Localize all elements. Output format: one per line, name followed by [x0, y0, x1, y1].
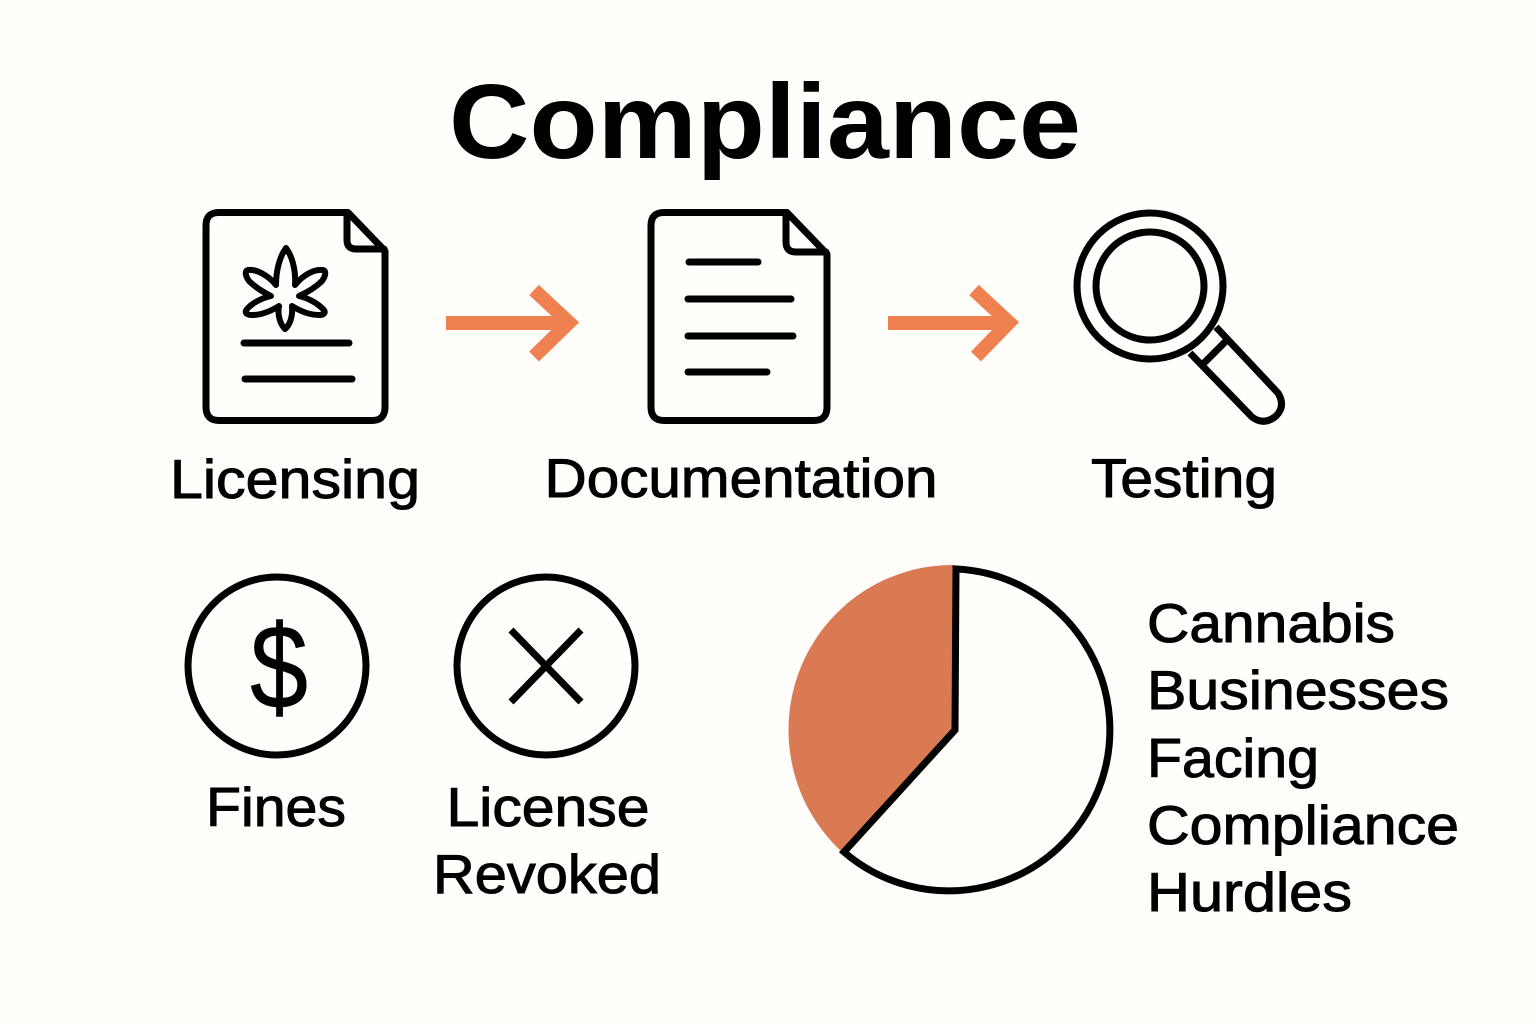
label: licensing: Licensing	[170, 448, 420, 510]
pie chart caption: Facing	[1147, 727, 1319, 789]
label: testing: Testing	[1091, 447, 1277, 509]
icon: license revoked cross	[457, 577, 635, 755]
pie chart caption	[1147, 592, 1459, 923]
label: license revoked	[433, 776, 661, 905]
arrow: documentation to testing	[888, 290, 1009, 356]
icon: magnifying glass	[1077, 213, 1282, 421]
pie chart caption: Hurdles	[1147, 861, 1352, 923]
icon: fines dollar coin	[188, 577, 366, 755]
label: fines: Fines	[206, 776, 346, 838]
title: Compliance	[449, 63, 1081, 181]
label: license revoked: License	[446, 776, 650, 838]
pie chart	[788, 565, 1110, 891]
pie chart caption: Cannabis	[1147, 592, 1395, 654]
pie chart caption: Compliance	[1147, 794, 1459, 856]
arrow: licensing to documentation	[446, 290, 569, 356]
icon: fines dollar coin: $	[250, 600, 308, 734]
icon: licensing document with leaf	[206, 212, 385, 420]
pie chart caption: Businesses	[1147, 659, 1449, 721]
label: license revoked: Revoked	[433, 843, 661, 905]
label: documentation: Documentation	[544, 447, 938, 509]
icon: documentation page	[651, 212, 827, 420]
